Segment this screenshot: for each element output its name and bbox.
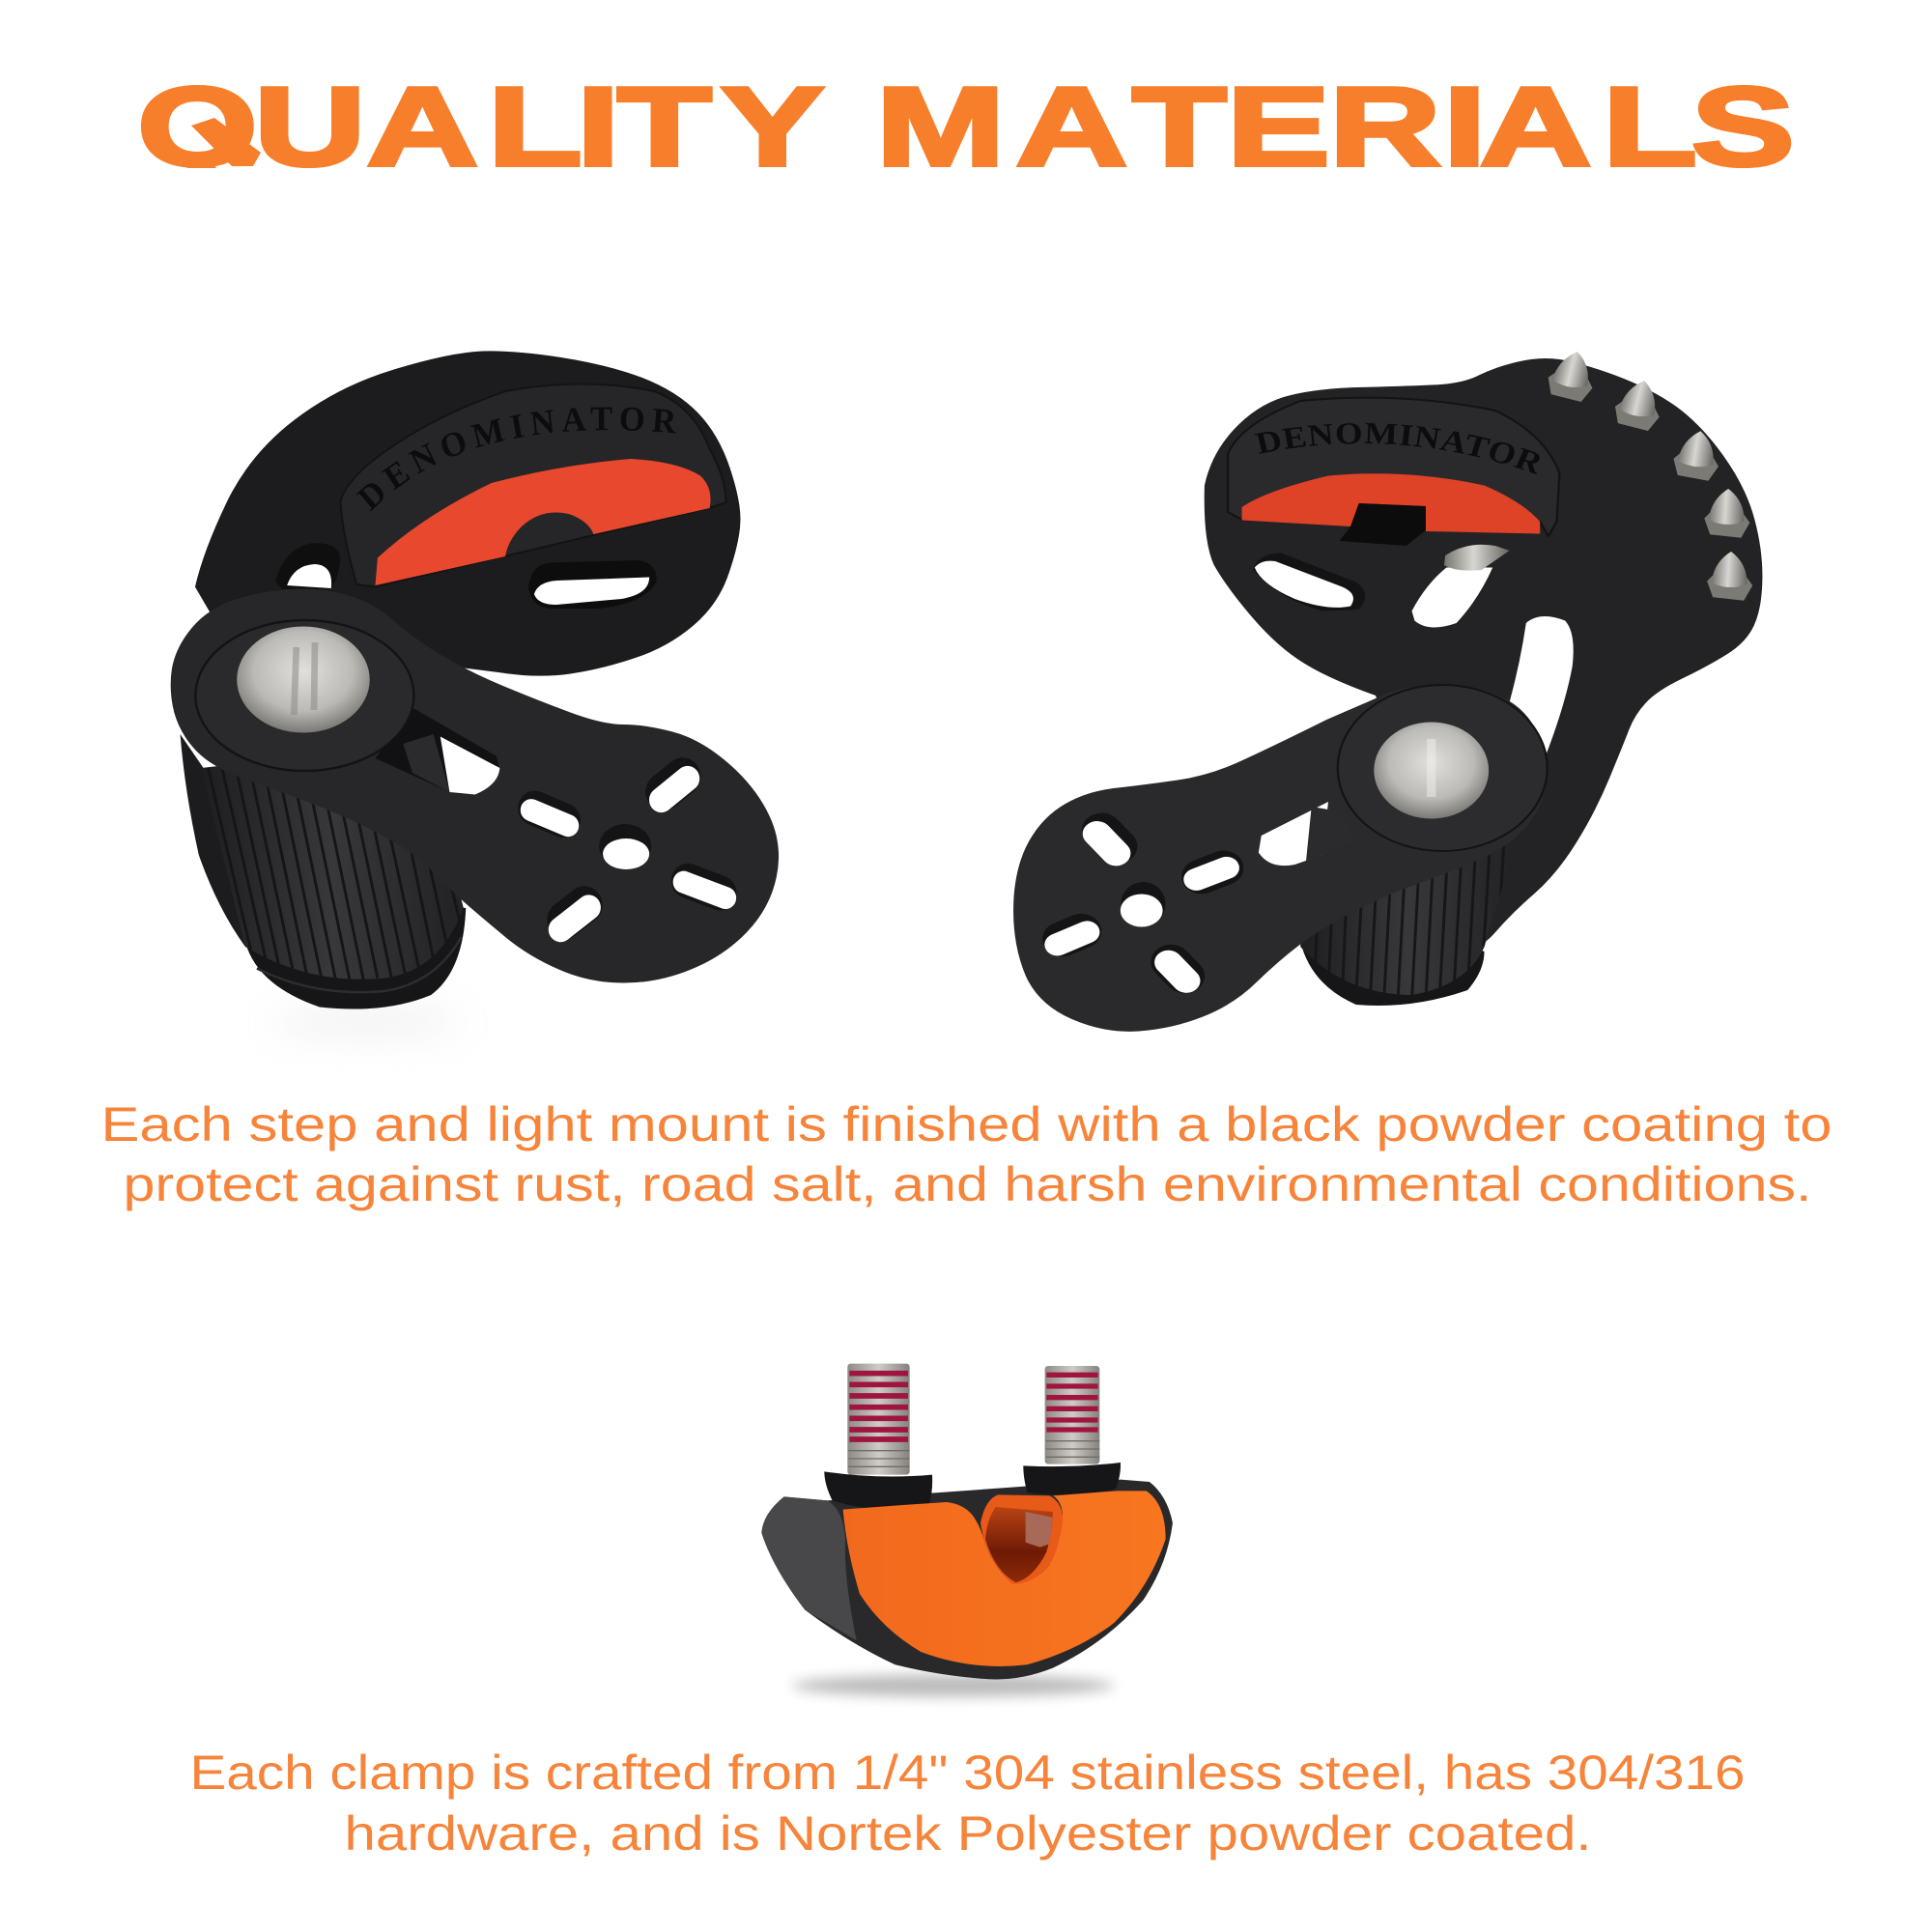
ground shadow: [792, 1675, 1114, 1696]
dome bolt head: [1374, 723, 1489, 819]
back plate: [1205, 358, 1762, 952]
text block: powder coating: [100, 1097, 1832, 1211]
text block: clamp materials: Each clamp is crafted from 1/4" 304 stainless steel, has 304/316: [189, 1746, 1745, 1800]
right screw: [1045, 1366, 1099, 1464]
text block: powder coating: Each step and light mount is finished with a black powder coating to: [100, 1097, 1832, 1151]
title: QUALITY MATERIALS: [137, 64, 1795, 189]
red clamp face: [375, 459, 711, 585]
arm slot: [1259, 802, 1328, 866]
embossed brand: DENOMINATOR: [1254, 423, 1540, 474]
plate hole left: [275, 543, 340, 589]
dome bolt head: [237, 626, 370, 732]
arm mounting holes: [513, 750, 741, 947]
washer: [1338, 685, 1548, 851]
inner metal tab: [1026, 1512, 1052, 1548]
product photo: right light mount: [1013, 352, 1762, 1032]
rubber pad: [340, 384, 725, 587]
back plate: [195, 351, 740, 676]
plate windows: [1253, 545, 1574, 755]
arm: [171, 588, 779, 983]
cylinder grip: [1300, 846, 1505, 1006]
washer: [195, 620, 413, 771]
arm slot: [375, 707, 498, 794]
left washer: [824, 1471, 932, 1509]
orange clamp plate: [843, 1491, 1166, 1666]
right washer: [1023, 1463, 1121, 1495]
plate slot: [528, 560, 657, 609]
arm mounting holes: [1036, 806, 1250, 1001]
cylinder grip: [201, 744, 466, 1009]
rubber pad: [1228, 398, 1559, 536]
text block: clamp materials: [189, 1746, 1745, 1861]
title: [141, 85, 1791, 168]
embossed brand: DENOMINATOR: [356, 408, 676, 512]
product photo: orange clamp: [761, 1364, 1173, 1696]
cap nuts: [1544, 348, 1754, 601]
arm: [1013, 684, 1547, 1032]
text block: clamp materials: hardware, and is Nortek Polyester powder coated.: [344, 1806, 1592, 1861]
product photo: left step mount: [170, 351, 779, 1009]
rubber side face: [761, 1496, 857, 1640]
rubber body: [761, 1480, 1173, 1679]
red clamp face: [1242, 473, 1540, 533]
text block: powder coating: protect against rust, road salt, and harsh environmental conditions.: [124, 1157, 1812, 1211]
left screw: [847, 1364, 910, 1475]
hole rim: [980, 1494, 1063, 1584]
clamp hole: [985, 1507, 1053, 1582]
ground shadow: left product: [270, 1012, 464, 1032]
